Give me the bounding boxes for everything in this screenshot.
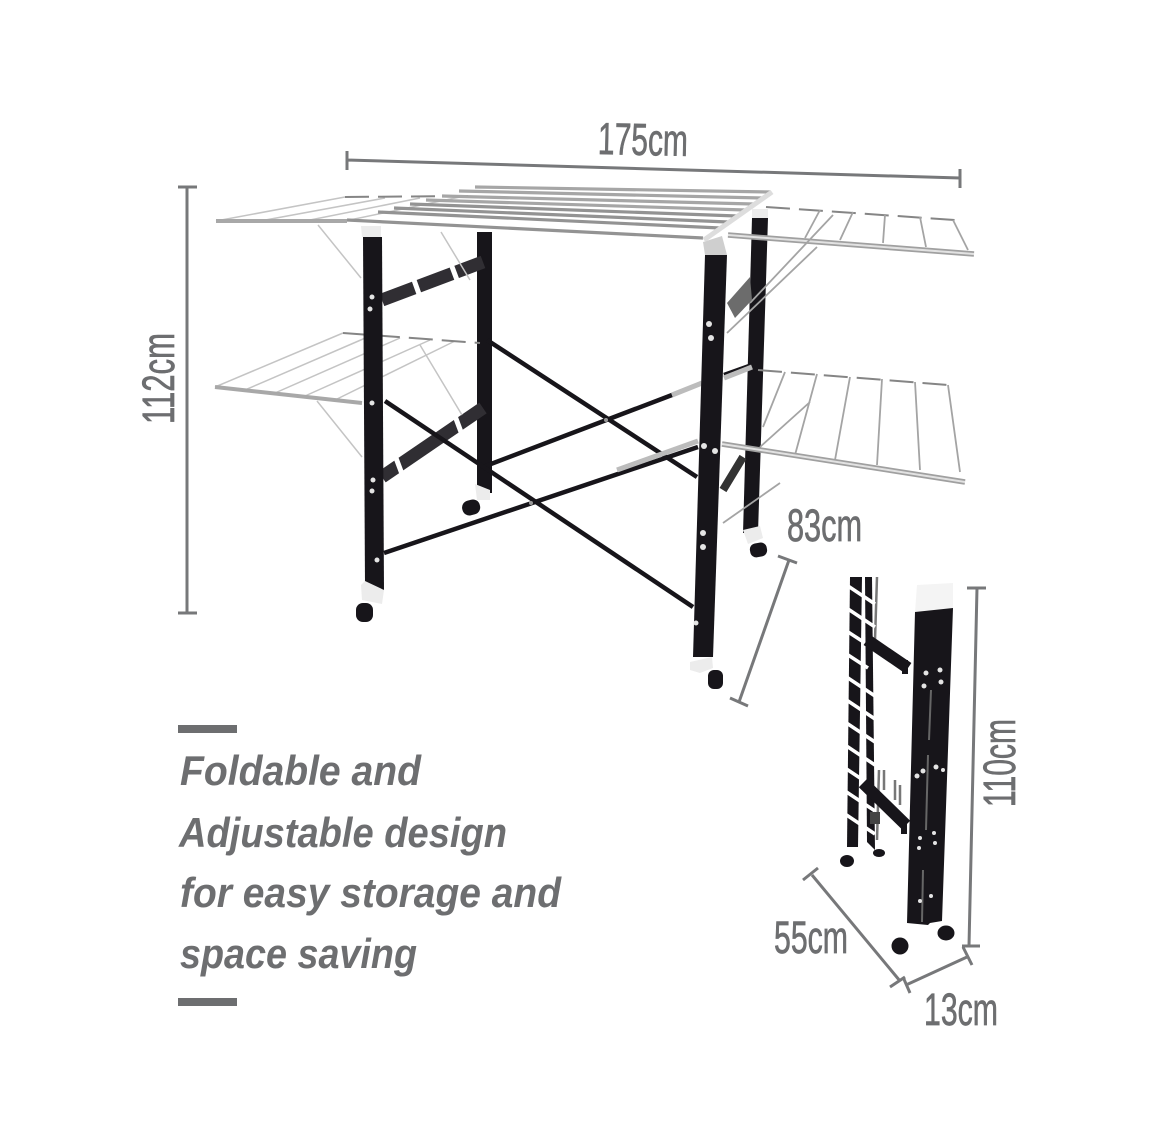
caption text: Adjustable design [178,809,507,856]
folded wing strips [840,577,908,867]
folded legs [892,583,954,954]
x braces [384,340,752,607]
leg bolts [368,294,718,626]
dimension: folded width 13cm: 13cm [924,984,998,1035]
caption text: space saving [180,930,417,977]
dimension: depth 83cm [730,500,862,706]
lower left wing [215,333,480,457]
dimension: height 112cm [133,187,197,613]
lower right wing [722,370,965,523]
front legs [356,226,727,689]
bottom rule [178,998,237,1006]
upper right wing [727,207,974,333]
dimension: folded width 13cm [903,947,998,1035]
drying rack: folded view [840,577,954,954]
upper left wing [216,196,470,280]
caption text: for easy storage and [180,869,562,916]
caption text [178,747,562,977]
dimension: folded depth 55cm: 55cm [774,912,848,963]
dimension: height 112cm: 112cm [133,333,184,424]
dimension: folded height 110cm [962,588,1025,946]
dimension: width 175cm [347,113,960,188]
text block: foldable design note [178,725,562,1006]
dimension: width 175cm: 175cm [597,113,689,166]
dimension: folded depth 55cm [774,868,905,987]
back legs [460,209,768,558]
top centre rails [347,187,772,240]
dimension: folded height 110cm: 110cm [974,719,1025,807]
dimension: depth 83cm: 83cm [787,500,862,551]
caption text: Foldable and [180,747,422,794]
left cross bars with clips [382,262,483,477]
top rule [178,725,237,733]
drying rack: open view [215,187,974,689]
